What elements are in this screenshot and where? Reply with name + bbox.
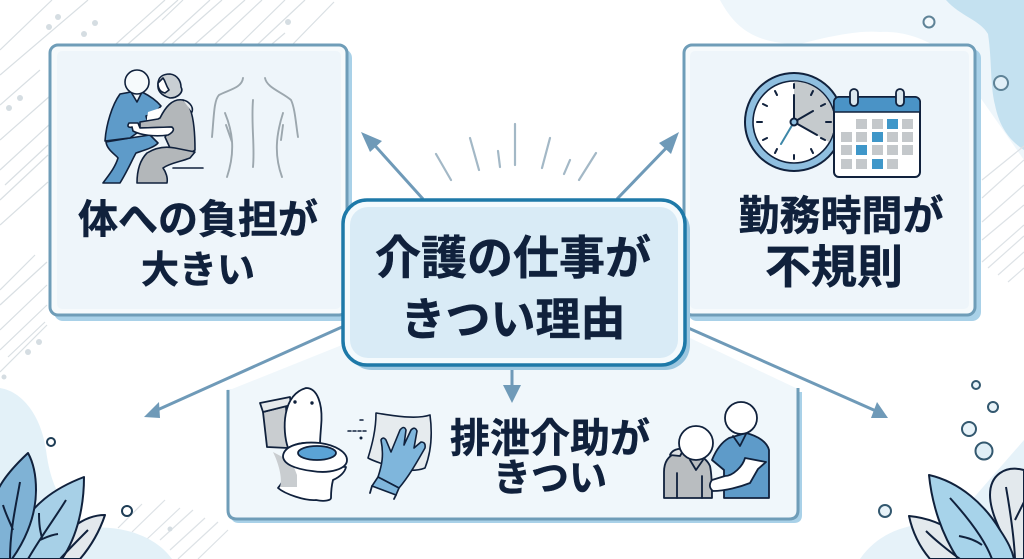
arrow: to body panel — [361, 132, 423, 199]
background: top-right blobs — [720, 0, 1024, 160]
icon: toilet — [260, 388, 347, 501]
arrow: lower right — [686, 327, 888, 418]
background: dots top-left — [2, 14, 291, 380]
icon: calendar — [834, 89, 920, 177]
icon: cloth and glove — [348, 413, 431, 499]
arrow: down — [503, 364, 521, 403]
icon: caregiver supporting elderly person — [103, 70, 203, 183]
label: irregular hours — [738, 193, 944, 293]
leaves: bottom-left plant — [0, 453, 105, 559]
icon: carer with elderly person — [664, 402, 769, 498]
title text: 介護の仕事が — [375, 232, 651, 284]
icon: human back outline — [212, 78, 298, 177]
background: bottom-right blob — [860, 440, 1024, 559]
panel: body burden — [50, 45, 352, 321]
panel: toileting assistance — [228, 388, 802, 523]
burst lines above centre — [436, 124, 596, 180]
arrow: to hours panel — [617, 132, 679, 199]
label: irregular hours: 勤務時間が — [738, 193, 944, 239]
icon: clock — [745, 73, 843, 171]
label: toileting assistance — [450, 417, 650, 500]
arrow: lower left — [144, 327, 342, 418]
leaves: bottom-right plant — [909, 469, 1024, 559]
background: diagonal hatch bottom-left — [118, 500, 228, 559]
label: body burden: 体への負担が — [78, 198, 318, 242]
panel: central title — [343, 200, 690, 370]
title text: きつい理由 — [400, 294, 626, 345]
title text — [375, 232, 651, 345]
background: bottom-left blob — [0, 388, 172, 559]
label: body burden: 大きい — [141, 250, 255, 292]
background: diagonal hatch right — [982, 146, 1024, 282]
panel: bottom connector background — [227, 338, 798, 500]
label: irregular hours: 不規則 — [765, 241, 903, 293]
label: toileting assistance: きつい — [493, 458, 607, 500]
label: toileting assistance: 排泄介助が — [450, 417, 650, 461]
label: body burden — [78, 198, 318, 292]
background: diagonal hatch top-left — [0, 0, 334, 372]
panel: irregular hours — [684, 45, 981, 321]
